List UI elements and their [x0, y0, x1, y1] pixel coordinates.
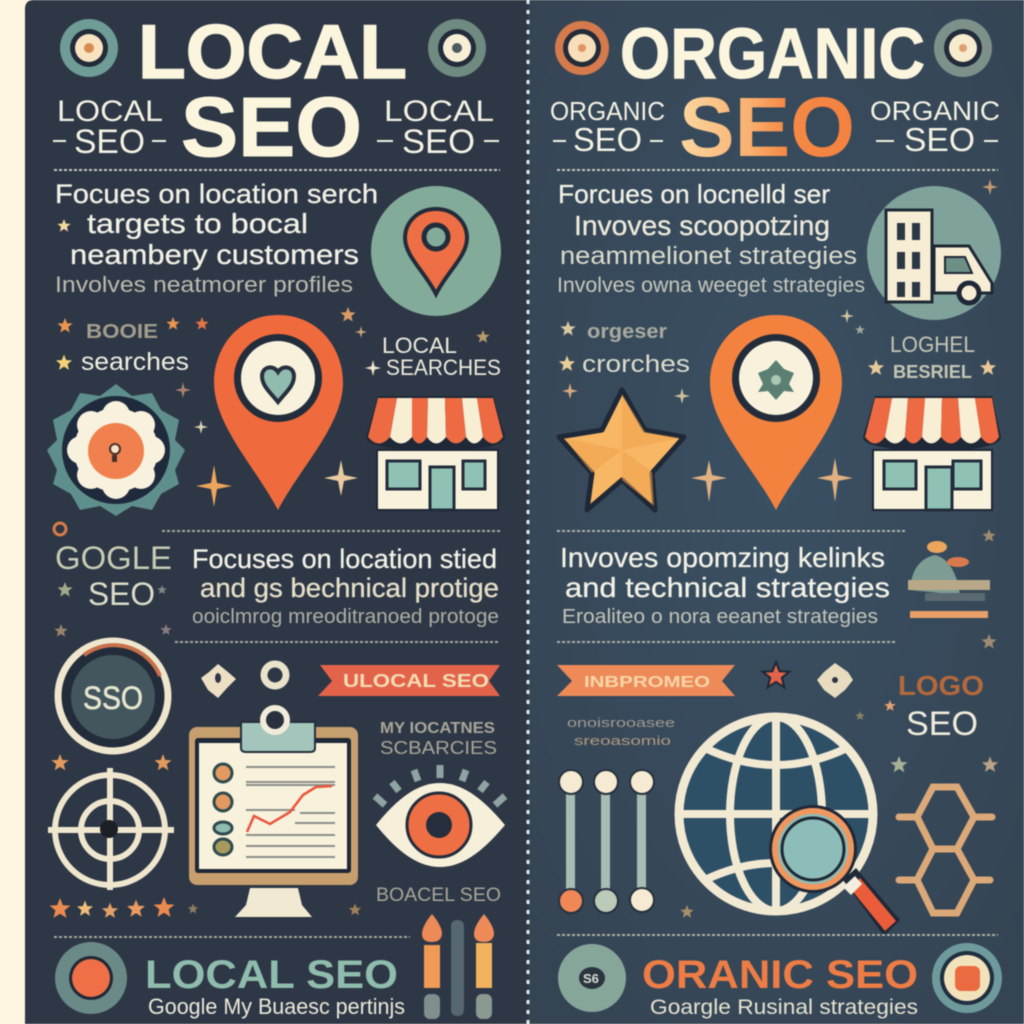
icon: sliders [559, 770, 654, 913]
footer subtitle: Google My Buaesc pertinjs [148, 994, 405, 1019]
banner: LOCAL SEO: ULOCAL SEO [343, 671, 489, 691]
text block: organic description: Invoves scoopotzing [574, 210, 830, 241]
label: right LOCAL SEO: SEO [402, 123, 475, 161]
banner: organic: INBPROMEO [584, 674, 710, 691]
label: GOOGLE SEO: GOGLE [55, 540, 172, 576]
label: MY LOCATIONS SEARCHES: MY IOCATNES [380, 720, 495, 737]
icon: SSO circle: SSO [83, 680, 143, 716]
icon: top left target circle [60, 19, 118, 77]
text block: backlinks and technical: Eroaliteo o nora eeanet strategies [562, 606, 878, 628]
label: left LOCAL SEO: SEO [74, 123, 145, 161]
icon: top left orange circle [555, 21, 609, 75]
icon: pencils [422, 914, 494, 1019]
sparkles [691, 458, 853, 502]
label: left ORGANIC SEO: ORGANIC [550, 96, 665, 126]
footer title: LOCAL SEO: LOCAL SEO [145, 953, 398, 997]
label: LOGO SEO: SEO [906, 705, 978, 743]
icon: small sparkles [196, 307, 490, 507]
icon: flower badge [47, 384, 185, 516]
text block: backlinks and technical: Invoves opomzing kelinks [560, 542, 885, 573]
text block: organic description: Involves owna weeget strategies [557, 274, 865, 297]
text block: backlinks and technical [560, 542, 890, 628]
banner: LOCAL SEO [318, 665, 500, 696]
text block: local description: neambery customers [70, 239, 359, 270]
stars by hexagons [890, 756, 998, 772]
icon: large orange pin [710, 315, 842, 510]
label: MY LOCATIONS SEARCHES: SCBARCIES [380, 738, 497, 758]
label: left LOCAL SEO: LOCAL [57, 95, 163, 128]
labels: searches [56, 317, 209, 434]
title: SEO orange: SEO [679, 80, 855, 174]
icon: storefront [366, 396, 505, 510]
rating stars [50, 897, 361, 918]
title: LOCAL: LOCAL [138, 10, 407, 95]
center dotted divider [526, 0, 530, 1024]
labels: organic searches: orgeser [587, 321, 667, 343]
icon: star and flower [763, 662, 853, 698]
labels: searches: searches [81, 348, 189, 376]
label: LOGO SEO [855, 670, 984, 743]
footer title: ORGANIC SEO: ORANIC SEO [642, 953, 918, 997]
text block: location and technical [192, 544, 499, 628]
label: right ORGANIC SEO: ORGANIC [870, 96, 1000, 126]
local column [47, 10, 505, 1019]
icon: map pin circle [371, 186, 501, 316]
label: GOOGLE SEO: SEO [88, 576, 155, 612]
label: right ORGANIC SEO [870, 96, 1000, 158]
text block: backlinks and technical: and technical strategies [565, 572, 890, 603]
text block: organic description: neammelionet strategies [560, 242, 857, 270]
icon: mountain stack [908, 529, 997, 648]
text block: local description [55, 179, 378, 297]
label: LOCAL SEARCHES: LOCAL [382, 333, 457, 358]
panel: local SEO [25, 0, 528, 1024]
labels: organic searches: crorches [582, 351, 690, 378]
label: right LOCAL SEO: LOCAL [384, 95, 494, 128]
text block: local description: Focues on location serch [55, 179, 378, 209]
text block: location and technical: and gs bechnical protige [200, 573, 499, 603]
label: LOGHEL [868, 332, 996, 382]
icon: small ornaments [201, 664, 286, 698]
icon: molecule hexagons [899, 787, 992, 913]
text block: organic description: Forcues on locnelld ser [558, 179, 830, 209]
text block: organic description [557, 179, 865, 297]
icon: top right target circle [428, 19, 486, 77]
footer subtitle: Goargle Rusinal strategies [650, 996, 918, 1019]
label: LOGHEL: LOGHEL [890, 332, 975, 357]
label: left LOCAL SEO [53, 95, 166, 161]
label: LOCAL SEARCHES [382, 333, 501, 380]
icon: large orange location pin [214, 315, 343, 510]
text block: local description: Involves neatmorer profiles [55, 272, 353, 297]
title: SEO: SEO [181, 80, 362, 174]
icon: footer teal circle: S6 [583, 971, 599, 986]
icon: storefront right [863, 396, 1001, 510]
small blurred labels: onoisrooasee [567, 715, 675, 730]
text block: location and technical: ooiclmrog mreoditranoed protoge [192, 606, 499, 628]
label: left ORGANIC SEO: SEO [573, 121, 642, 158]
icon: target crosshair [48, 768, 174, 890]
small star by building [982, 179, 998, 195]
icon: eye [375, 765, 505, 867]
title: ORGANIC: ORGANIC [620, 15, 925, 94]
label: right ORGANIC SEO: SEO [904, 121, 975, 158]
banner: organic [557, 665, 735, 696]
label: LOCAL SEO small: BOACEL SEO [376, 885, 501, 906]
small blurred labels: sreoasomio [574, 733, 671, 748]
text block: location and technical: Focuses on location stied [192, 544, 497, 574]
label: right LOCAL SEO [377, 95, 499, 161]
label: LOCAL SEARCHES: SEARCHES [386, 355, 501, 380]
stars beside target [51, 754, 172, 770]
labels: searches: BOOIE [86, 321, 158, 343]
icon: footer orange circle [932, 943, 1002, 1013]
label: LOGHEL: BESRIEL [893, 362, 972, 382]
icon: top right gray circle [934, 19, 992, 77]
icon: SSO circle [58, 641, 168, 751]
label: left ORGANIC SEO [550, 96, 665, 158]
icon: clipboard monitor with chart [189, 708, 358, 917]
icon: footer teal circle [558, 944, 626, 1012]
organic column [550, 15, 1002, 1019]
label: MY LOCATIONS SEARCHES [380, 720, 497, 758]
text block: local description: targets to bocal [87, 208, 308, 239]
icon: building and truck [867, 186, 1001, 320]
labels: organic searches [559, 309, 865, 404]
small blurred labels [567, 715, 675, 748]
icon: big star [559, 390, 684, 510]
panel: organic SEO [528, 0, 1024, 1024]
icon: footer orange circle [55, 942, 127, 1014]
icon: globe with magnifier [679, 717, 900, 936]
label: GOOGLE SEO [54, 523, 172, 637]
label: LOGO SEO: LOGO [898, 670, 984, 701]
